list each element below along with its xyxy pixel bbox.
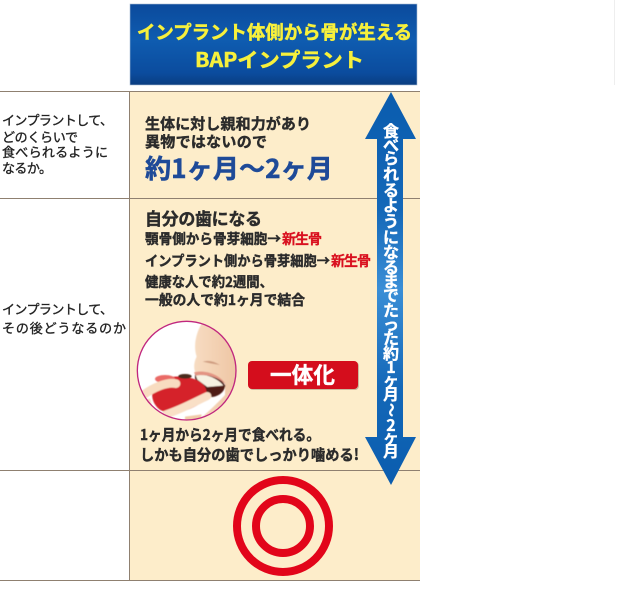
row label: how long until eating: インプラントして、	[2, 110, 113, 129]
text block: can eat in one to two months: 1ヶ月から2ヶ月で食べれる。	[140, 424, 320, 445]
row label: what happens afterwards: インプラントして、	[2, 299, 113, 318]
text block: biocompatibility: 異物ではないので	[145, 131, 267, 152]
table grid lines	[0, 91, 420, 581]
double-headed arrow: time until eating: 食べられるようになるまでたった約1ヶ月2ヶ月	[383, 118, 399, 462]
text block: can eat in one to two months	[140, 424, 359, 465]
double-headed arrow: time until eating	[365, 92, 416, 485]
text block: biocompatibility: 生体に対し親和力があり	[145, 113, 311, 134]
text block: biocompatibility	[145, 113, 333, 186]
faint vertical rule	[614, 0, 615, 85]
panel: cream column background	[130, 92, 420, 580]
badge: integration: 一体化	[270, 358, 335, 390]
header banner	[130, 4, 417, 85]
text block: becomes your own tooth	[145, 205, 371, 310]
row label: how long until eating: なるか。	[2, 158, 52, 177]
row label: what happens afterwards	[2, 299, 126, 337]
text block: biocompatibility: 約1ヶ月〜2ヶ月	[145, 149, 333, 186]
text block: becomes your own tooth: インプラント側から骨芽細胞→	[145, 251, 330, 271]
text block: becomes your own tooth: 顎骨側から骨芽細胞→	[145, 229, 281, 249]
header banner: BAPインプラント	[195, 44, 364, 73]
row label: how long until eating: 食べられるように	[2, 142, 108, 161]
text block: becomes your own tooth: 新生骨	[282, 229, 322, 249]
row label: how long until eating	[2, 110, 113, 177]
text block: becomes your own tooth: 一般の人で約1ヶ月で結合	[145, 290, 305, 310]
text block: can eat in one to two months: しかも自分の歯でしっかり噛める!	[140, 444, 359, 465]
double-headed arrow: time until eating: 〜	[381, 403, 401, 417]
text block: becomes your own tooth: 新生骨	[331, 251, 371, 271]
badge: integration	[248, 358, 359, 390]
text block: becomes your own tooth: 健康な人で約2週間、	[145, 272, 273, 292]
row label: how long until eating: どのくらいで	[2, 127, 78, 146]
header banner: インプラント体側から骨が生える	[137, 19, 412, 45]
icon: double circle rating	[237, 480, 329, 572]
text block: becomes your own tooth: 自分の歯になる	[145, 205, 262, 230]
photo: woman biting a tomato	[137, 317, 242, 423]
row label: what happens afterwards: その後どうなるのか	[2, 318, 126, 337]
